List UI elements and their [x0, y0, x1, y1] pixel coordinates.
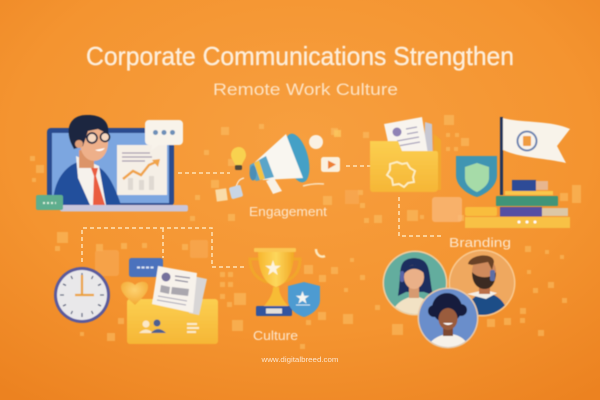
pale panel [432, 197, 462, 222]
folder base [127, 299, 218, 344]
cable and small boxes [234, 178, 244, 189]
title: Corporate Communications Strengthen [86, 41, 514, 71]
mini chart glyph [187, 324, 199, 332]
cup [258, 251, 294, 287]
laptop screen [47, 128, 174, 206]
shield [456, 156, 497, 197]
green tag [36, 195, 63, 210]
base [256, 306, 292, 316]
icon: megaphone with lightbulb [215, 130, 341, 202]
circle [309, 135, 323, 149]
pale glow panels [95, 190, 359, 276]
flag [500, 117, 570, 195]
folder [370, 134, 441, 192]
portrait: woman with headset [382, 250, 448, 320]
people glyph [139, 320, 166, 333]
icon: workplace folder with document, heart and tag [121, 258, 218, 344]
bell [280, 131, 314, 185]
handles [250, 259, 300, 282]
team portraits [382, 250, 516, 348]
label: culture: Culture [253, 328, 298, 343]
cone body [255, 134, 303, 180]
back sheet [189, 276, 207, 315]
video card [321, 157, 340, 172]
icon: branding folder, shield, flag, books [370, 117, 570, 228]
label: engagement: Engagement [249, 204, 327, 219]
laptop base [60, 205, 188, 212]
lightbulb [231, 147, 246, 170]
man [53, 115, 121, 205]
icon: presenter on laptop [36, 115, 188, 212]
document [152, 266, 197, 313]
icon: trophy with shield [250, 248, 325, 317]
portrait: bearded man with headset [448, 250, 516, 318]
document in folder [384, 117, 433, 160]
blue tag [129, 258, 163, 277]
handle [266, 178, 282, 194]
books [465, 180, 570, 228]
portrait: woman with curly hair [418, 288, 478, 348]
scattered background squares [30, 115, 581, 349]
label: branding: Branding [449, 235, 511, 250]
heart [121, 282, 148, 305]
website: www.digitalbreed.com [260, 355, 338, 364]
phone squiggle [316, 249, 325, 257]
subtitle: Remote Work Culture [213, 80, 398, 99]
speech bubble [145, 120, 183, 151]
star [265, 260, 281, 275]
dashed connectors [82, 166, 441, 267]
icon: wall clock [54, 267, 110, 323]
badge shield [288, 282, 320, 317]
chart slide [117, 145, 167, 195]
